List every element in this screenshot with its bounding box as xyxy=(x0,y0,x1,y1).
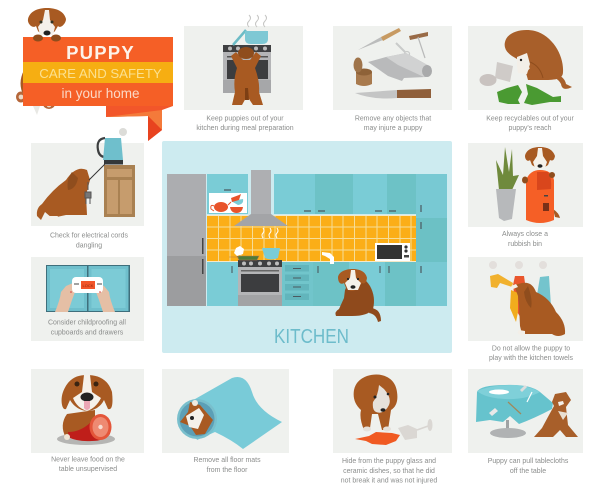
caption: Keep puppies out of your xyxy=(206,116,284,122)
banner tail xyxy=(106,106,173,141)
icon: puppy looking down xyxy=(354,375,397,432)
panel: rubbish bin xyxy=(468,143,583,227)
caption: rubbish bin xyxy=(508,241,542,248)
icon: puppy from behind xyxy=(231,47,263,105)
panel: keep puppies out of kitchen xyxy=(184,15,303,110)
heading: care and safety: CARE AND SAFETY xyxy=(39,66,162,81)
caption xyxy=(51,456,125,473)
caption xyxy=(196,116,294,132)
panel: objects that may injure xyxy=(333,26,452,110)
panel: floor mats xyxy=(162,369,289,453)
icon: hands with lock: LOCK xyxy=(83,283,94,288)
panel: kitchen towels xyxy=(468,257,583,341)
icon: cabinet xyxy=(104,165,135,217)
icon: puppy with cord xyxy=(37,164,105,220)
fridge xyxy=(167,174,206,306)
icon: table stand xyxy=(490,420,526,438)
caption: off the table xyxy=(510,468,546,475)
icon: pot with steam xyxy=(233,15,268,45)
caption xyxy=(48,320,126,336)
icon: puppy in roll xyxy=(180,400,213,435)
icon: corkscrew xyxy=(409,32,428,58)
microwave xyxy=(375,243,410,261)
faucet xyxy=(322,252,334,264)
icon: glass jar xyxy=(480,62,513,86)
panel: electrical cords xyxy=(31,128,144,226)
base cabinets xyxy=(207,262,416,306)
caption: Never leave food on the xyxy=(51,456,125,464)
banner body xyxy=(23,37,173,106)
caption: table unsupervised xyxy=(59,466,117,473)
caption: play with the kitchen towels xyxy=(489,355,574,362)
panel: food on table xyxy=(31,369,144,453)
icon: tipped wine glass xyxy=(398,419,432,440)
puppy xyxy=(335,269,381,322)
panel: tablecloth xyxy=(468,369,583,453)
caption xyxy=(502,231,548,248)
shelf with teapot and bowls xyxy=(209,193,247,213)
icon: spilled liquid xyxy=(355,432,400,445)
icon: potted plant xyxy=(496,147,519,221)
upper cabinets xyxy=(207,174,447,306)
kitchen label: KITCHEN xyxy=(274,326,349,348)
icon: broken green bottle xyxy=(497,84,561,105)
stove xyxy=(238,260,282,306)
panel: kitchen scene xyxy=(162,141,452,353)
heading: puppy: PUPPY xyxy=(66,42,135,63)
caption: cupboards and drawers xyxy=(51,330,124,336)
icon: puppy over bin xyxy=(522,147,555,184)
caption: not break it and was not injured xyxy=(341,478,437,484)
panel: glass and ceramic xyxy=(333,369,452,453)
icon: orange bin xyxy=(526,170,560,223)
caption xyxy=(341,458,437,484)
icon: towels xyxy=(490,274,551,322)
caption xyxy=(488,458,569,475)
icon: puppy pulling towel xyxy=(511,283,565,336)
caption: Check for electrical cords xyxy=(50,232,128,240)
icon: dog head and body xyxy=(62,375,112,438)
icon: hooks xyxy=(489,261,547,269)
caption: may injure a puppy xyxy=(364,125,423,132)
caption: from the floor xyxy=(207,467,248,474)
mascot head xyxy=(28,8,66,42)
icon: chef knife xyxy=(355,89,431,98)
caption: puppy's reach xyxy=(509,125,552,132)
caption: dangling xyxy=(76,242,102,250)
icon: cupboard doors xyxy=(46,265,130,312)
caption: Keep recyclables out of your xyxy=(486,116,574,122)
caption: Consider childproofing all xyxy=(48,320,126,326)
caption: Do not allow the puppy to xyxy=(492,346,570,352)
icon: small knife xyxy=(358,28,401,50)
caption: Puppy can pull tablecloths xyxy=(488,458,569,465)
icon: tablecloth pulled xyxy=(476,385,553,424)
caption xyxy=(489,346,574,362)
panel: childproofing xyxy=(31,257,144,341)
icon: foil roll xyxy=(368,53,432,81)
icon: bottle opener xyxy=(396,43,410,56)
yellow band xyxy=(23,62,173,83)
heading: in your home: in your home xyxy=(61,86,140,101)
icon: plate xyxy=(57,433,115,445)
icon: rolled mat xyxy=(177,377,282,449)
title banner xyxy=(16,8,173,141)
caption xyxy=(193,457,261,474)
caption: ceramic dishes, so that he did xyxy=(343,468,435,475)
caption: Remove all floor mats xyxy=(193,457,261,464)
range hood xyxy=(234,170,288,226)
caption: kitchen during meal preparation xyxy=(196,125,294,132)
caption xyxy=(486,116,574,132)
icon: stove xyxy=(223,45,271,93)
icon: tin can xyxy=(354,58,372,86)
caption: Remove any objects that xyxy=(355,116,431,122)
mascot body behind banner xyxy=(16,70,55,115)
caption xyxy=(355,116,431,132)
icon: puppy sniffing xyxy=(505,30,572,89)
icon: kettle xyxy=(98,128,127,164)
icon: puppy pulling cloth xyxy=(534,392,578,437)
pot and pan xyxy=(229,228,280,260)
tile backsplash xyxy=(207,215,416,262)
caption xyxy=(50,232,128,250)
caption: Hide from the puppy glass and xyxy=(342,458,436,465)
icon: ham xyxy=(64,414,112,441)
caption: Always close a xyxy=(502,231,548,238)
panel: recyclables xyxy=(468,26,583,110)
